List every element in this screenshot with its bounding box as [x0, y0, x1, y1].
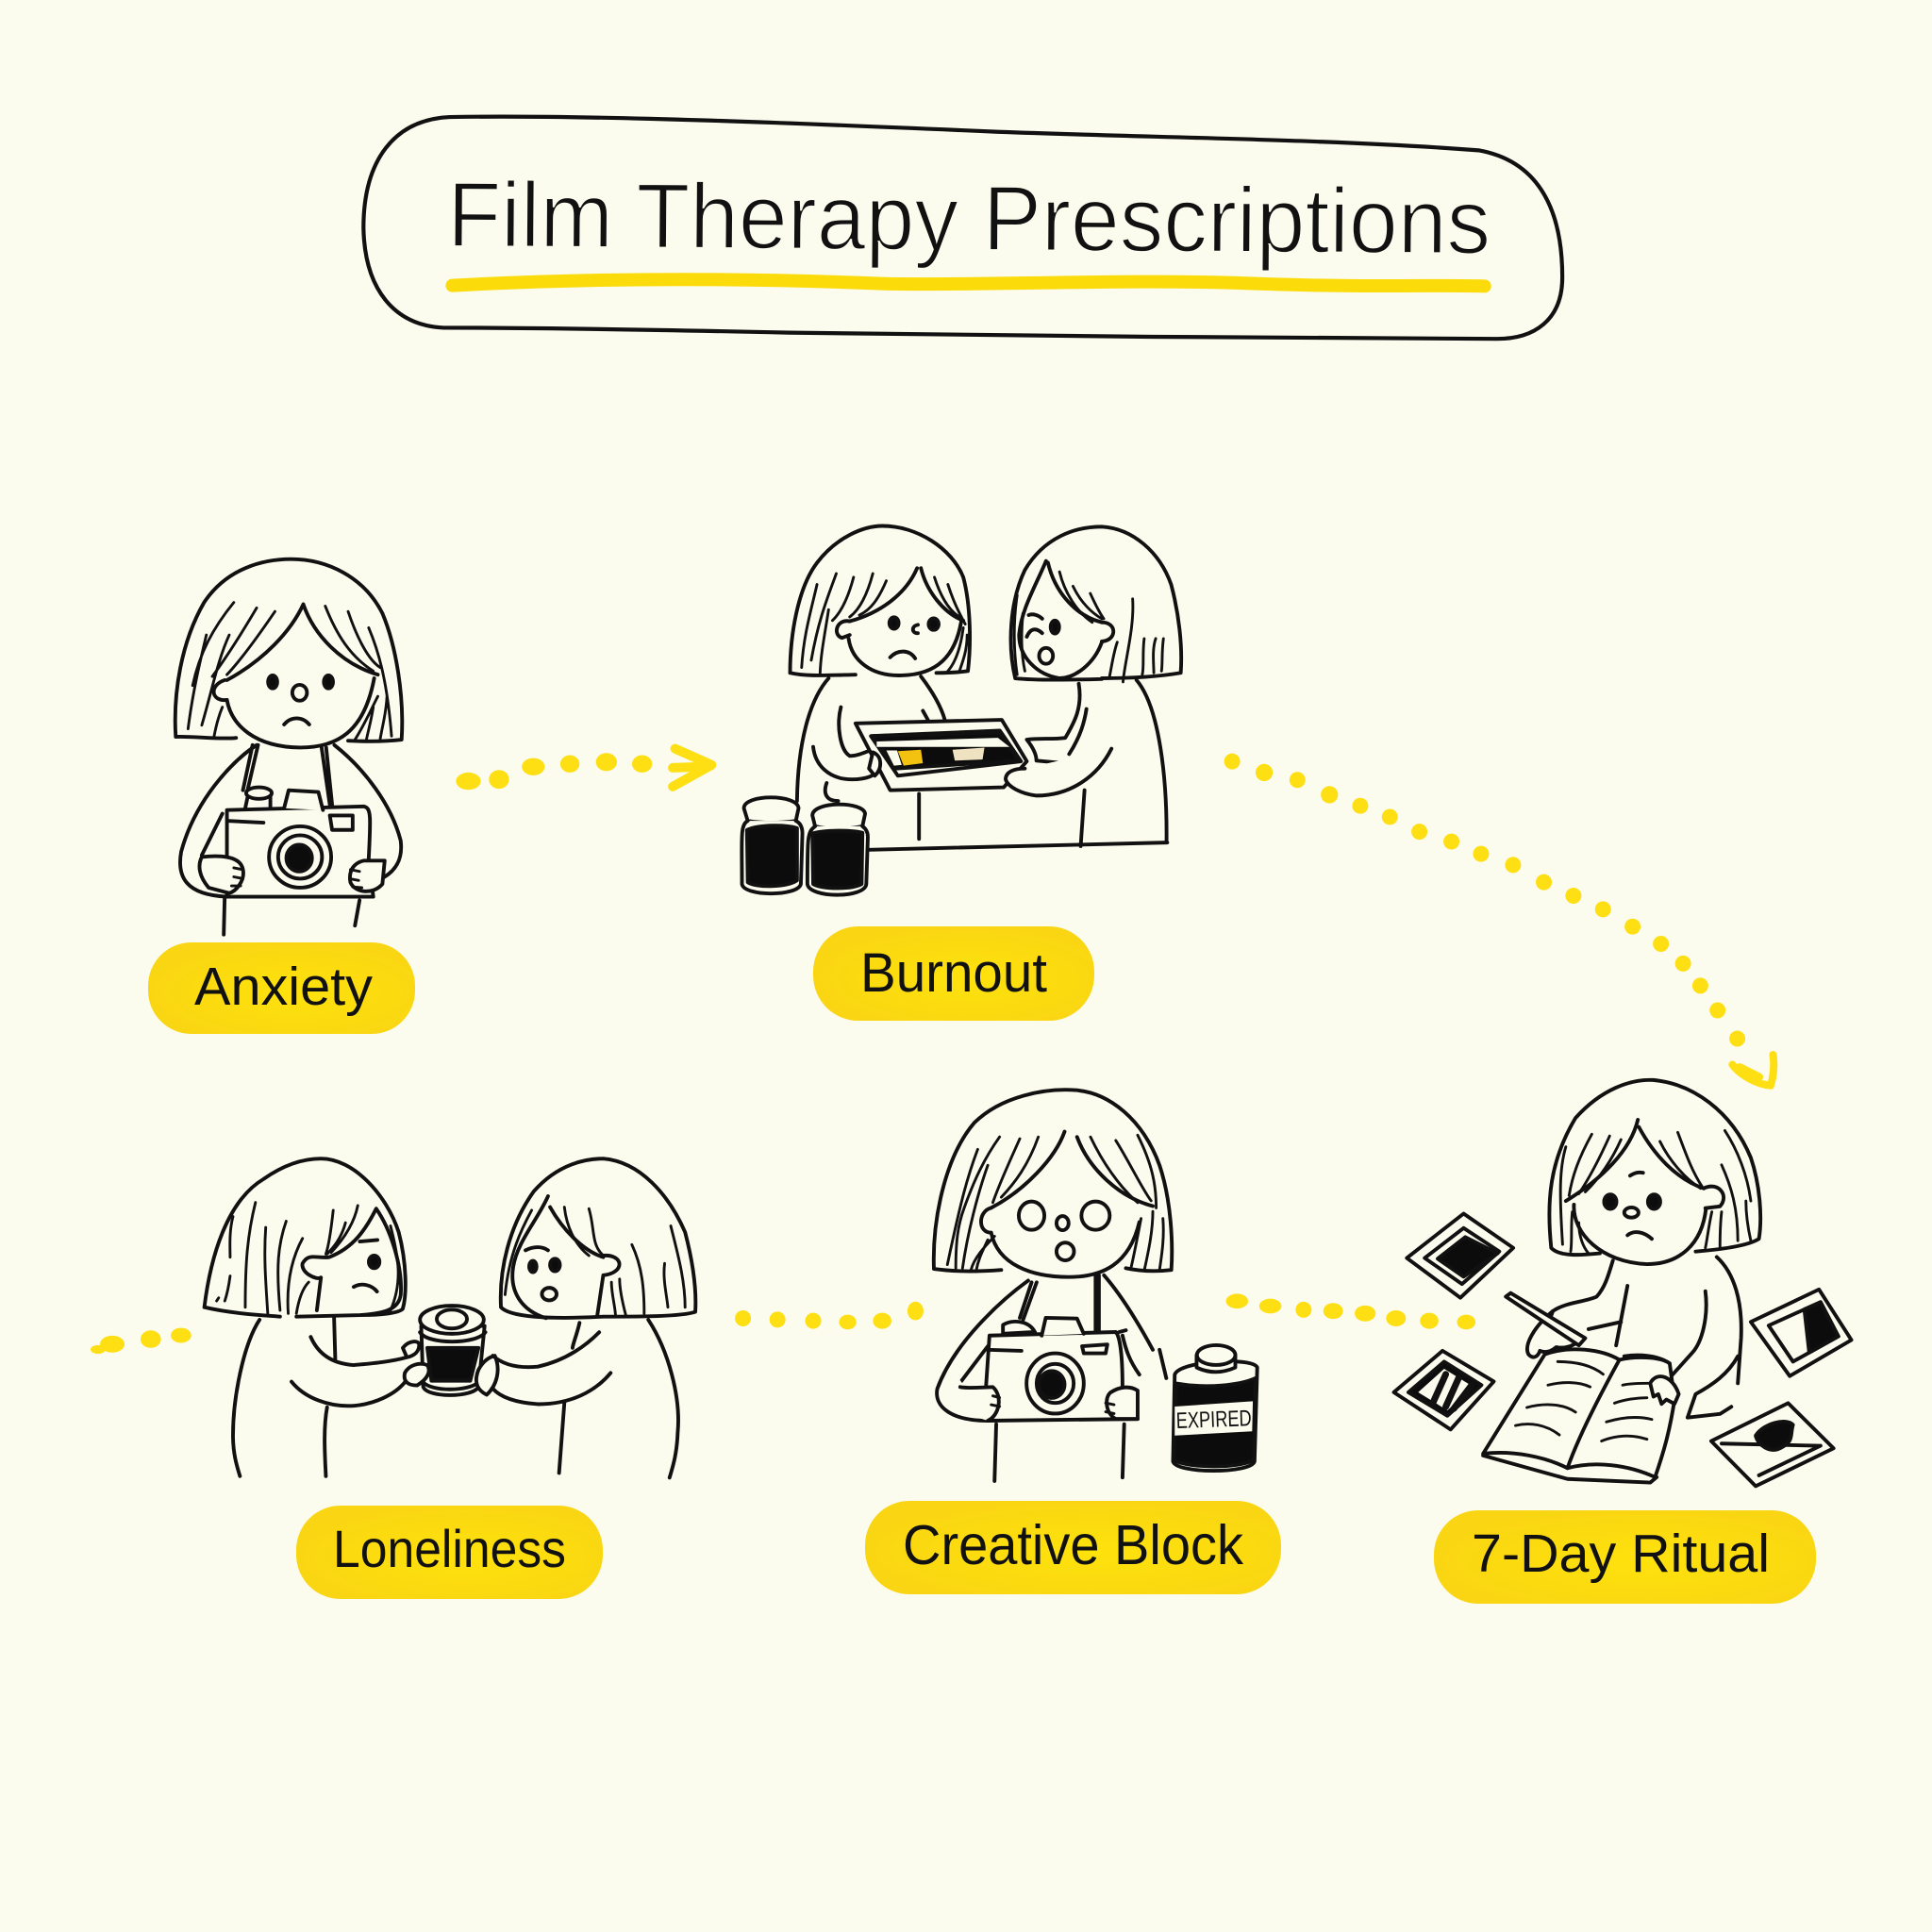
- label pill: 7-Day Ritual: [1434, 1510, 1816, 1604]
- photo 3: [1751, 1290, 1852, 1376]
- photo 2: [1394, 1351, 1493, 1429]
- right girl: [492, 1158, 695, 1477]
- canister label text: EXPIRED: [1175, 1406, 1252, 1434]
- label pill: Anxiety: [148, 942, 415, 1034]
- label pill: Creative Block: Creative Block: [903, 1514, 1243, 1576]
- panel: loneliness: [205, 1158, 695, 1599]
- title outline: [363, 117, 1562, 339]
- jars: [741, 797, 868, 895]
- title text: Film Therapy Prescriptions: [447, 162, 1491, 274]
- figure: wide-eyed girl with camera and expired film: [934, 1090, 1257, 1481]
- girl B: [1006, 526, 1181, 846]
- arrow: anxiety to burnout: [456, 749, 711, 790]
- label pill: Burnout: [813, 926, 1094, 1021]
- title box: [363, 117, 1562, 339]
- expired film canister: [1173, 1345, 1257, 1471]
- panel: burnout: [741, 526, 1181, 1021]
- arrow: ritual to creative block: [1226, 1293, 1475, 1329]
- hand and pencil: [1506, 1293, 1679, 1404]
- label pill: Loneliness: Loneliness: [333, 1519, 566, 1578]
- figure: girl writing in journal surrounded by photos: [1394, 1080, 1852, 1486]
- hands: [942, 1380, 999, 1421]
- title underline: [452, 279, 1485, 286]
- head: [934, 1090, 1172, 1277]
- photo 4: [1711, 1403, 1834, 1486]
- label pill: Anxiety: Anxiety: [194, 957, 374, 1017]
- camera: [961, 1318, 1140, 1421]
- label pill: Creative Block: [865, 1501, 1281, 1594]
- hands: [199, 857, 243, 893]
- camera: [202, 788, 374, 897]
- arm and legs: [937, 1275, 1166, 1481]
- girl A: [791, 526, 1167, 850]
- arms and torso: [180, 745, 401, 935]
- figures: two girls sharing a film tray: [741, 526, 1181, 895]
- head: [1549, 1080, 1760, 1264]
- label pill: Loneliness: [296, 1506, 603, 1599]
- panel: 7-day ritual: [1394, 1080, 1852, 1604]
- arrow: burnout to ritual: [1224, 754, 1774, 1086]
- body: [1553, 1257, 1741, 1418]
- left girl: [205, 1158, 407, 1476]
- journal: [1483, 1349, 1674, 1483]
- arrow: creative block to loneliness: [735, 1302, 924, 1329]
- label pill: 7-Day Ritual: 7-Day Ritual: [1472, 1524, 1770, 1584]
- label pill: Burnout: Burnout: [860, 942, 1047, 1004]
- panel: anxiety: [148, 559, 415, 1034]
- panel: creative block: [865, 1090, 1281, 1594]
- film canister: [403, 1306, 498, 1395]
- film tray: [856, 720, 1026, 791]
- figures: two girls holding a film canister: [205, 1158, 695, 1477]
- hair and face: [175, 559, 402, 747]
- photo 1: [1407, 1213, 1513, 1298]
- figure: girl with camera: [175, 559, 402, 935]
- arrow: tail off loneliness: [91, 1328, 192, 1354]
